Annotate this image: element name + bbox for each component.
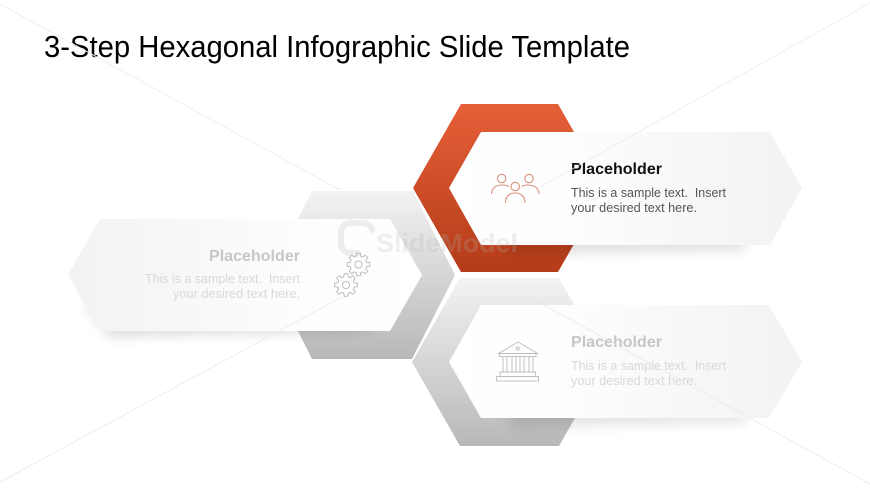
text: bottom right card: [571, 334, 726, 388]
panel: step 1 people (top right): [413, 104, 802, 272]
text: top right card: [571, 161, 726, 215]
text: top right card: Placeholder: [571, 161, 662, 178]
text: bottom right card: Placeholder: [571, 334, 662, 351]
card: bottom right: [449, 305, 802, 418]
card shadow: top right: [510, 225, 750, 254]
title: 3-Step Hexagonal Infographic Slide Template: [44, 29, 630, 64]
card shadow: bottom right: [510, 398, 750, 427]
text: left card: your desired text here.: [173, 286, 300, 301]
watermark: [341, 223, 518, 258]
text: left card: [145, 248, 300, 301]
text: left card: Placeholder: [209, 248, 300, 265]
icon: bank: [496, 342, 538, 381]
hexagon: orange: [413, 104, 606, 272]
watermark wordmark: SlideModel: [376, 228, 518, 258]
hexagon: grey bottom: [412, 278, 607, 446]
panel: step 2 gears (left): [68, 191, 455, 359]
watermark logo: [341, 223, 372, 253]
icon: people: [492, 174, 539, 202]
panel: step 3 bank (bottom right): [412, 278, 802, 446]
card: top right: [449, 132, 802, 245]
card: left: [68, 219, 422, 331]
hexagon: grey left: [270, 191, 455, 359]
text: top right card: This is a sample text. Insert: [571, 185, 726, 200]
text: left card: This is a sample text. Insert: [145, 271, 300, 286]
text: bottom right card: your desired text here.: [571, 373, 697, 388]
icon: gears: [335, 253, 370, 296]
card shadow: left: [85, 300, 370, 337]
text: bottom right card: This is a sample text. Insert: [571, 358, 726, 373]
text: top right card: your desired text here.: [571, 200, 697, 215]
